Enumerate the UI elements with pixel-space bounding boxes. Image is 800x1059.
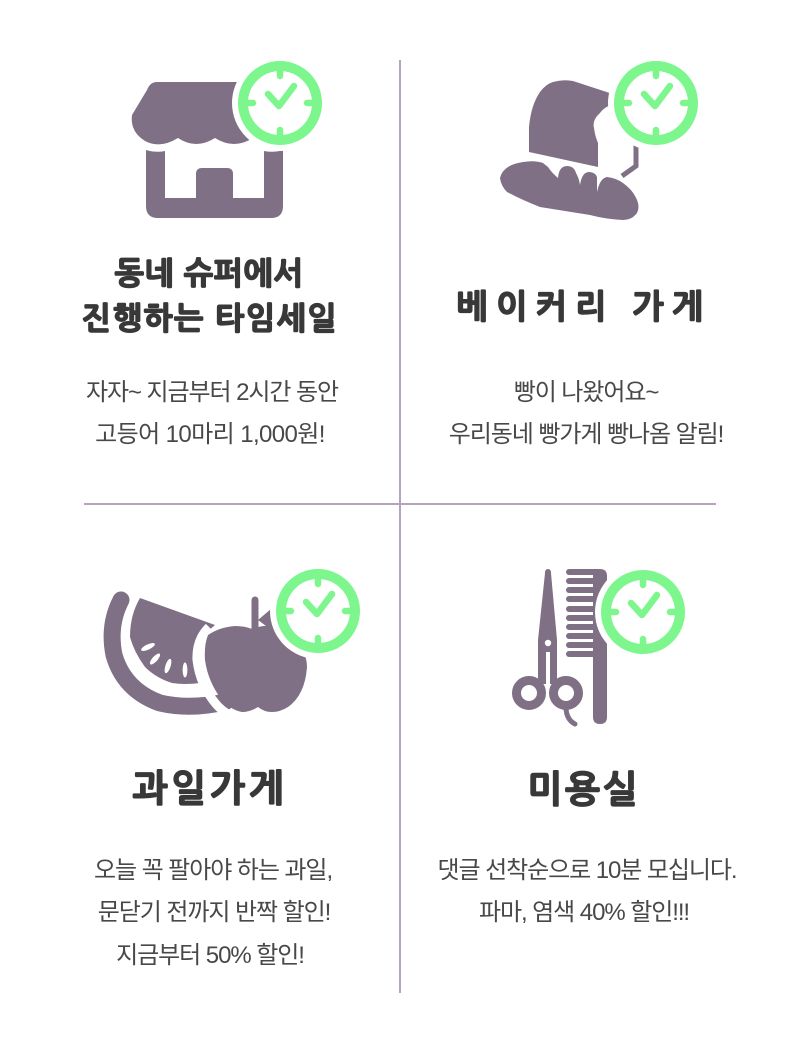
icon: store with clock <box>132 55 328 218</box>
icon: bread with clock <box>500 55 704 220</box>
panel: bakery <box>449 55 723 448</box>
heading: neighborhood supermarket: 진행하는 타임세일 <box>82 302 338 334</box>
panel: fruit store <box>94 563 366 969</box>
text: fruit store description: 지금부터 50% 할인! <box>116 942 304 969</box>
text: supermarket description: 자자~ 지금부터 2시간 동안 <box>86 379 339 406</box>
text: bakery description: 빵이 나왔어요~ <box>514 379 658 406</box>
heading: neighborhood supermarket: 동네 슈퍼에서 <box>115 257 303 289</box>
panel: neighborhood supermarket <box>82 55 339 448</box>
text: hair salon description: 파마, 염색 40% 할인!!! <box>479 899 689 926</box>
text: bakery description: 우리동네 빵가게 빵나옴 알림! <box>449 421 723 448</box>
heading: bakery: 베이커리 가게 <box>457 290 711 323</box>
text: fruit store description: 문닫기 전까지 반짝 할인! <box>98 899 330 926</box>
icon: scissors and comb with clock <box>516 564 691 724</box>
icon: watermelon and apple with clock <box>112 563 366 714</box>
heading: hair salon: 미용실 <box>527 770 641 808</box>
panel: hair salon <box>437 564 737 926</box>
heading: fruit store: 과일가게 <box>132 769 288 807</box>
text: hair salon description: 댓글 선착순으로 10분 모십니다. <box>437 857 737 884</box>
text: supermarket description: 고등어 10마리 1,000원! <box>95 421 325 448</box>
text: fruit store description: 오늘 꼭 팔아야 하는 과일, <box>94 857 332 884</box>
